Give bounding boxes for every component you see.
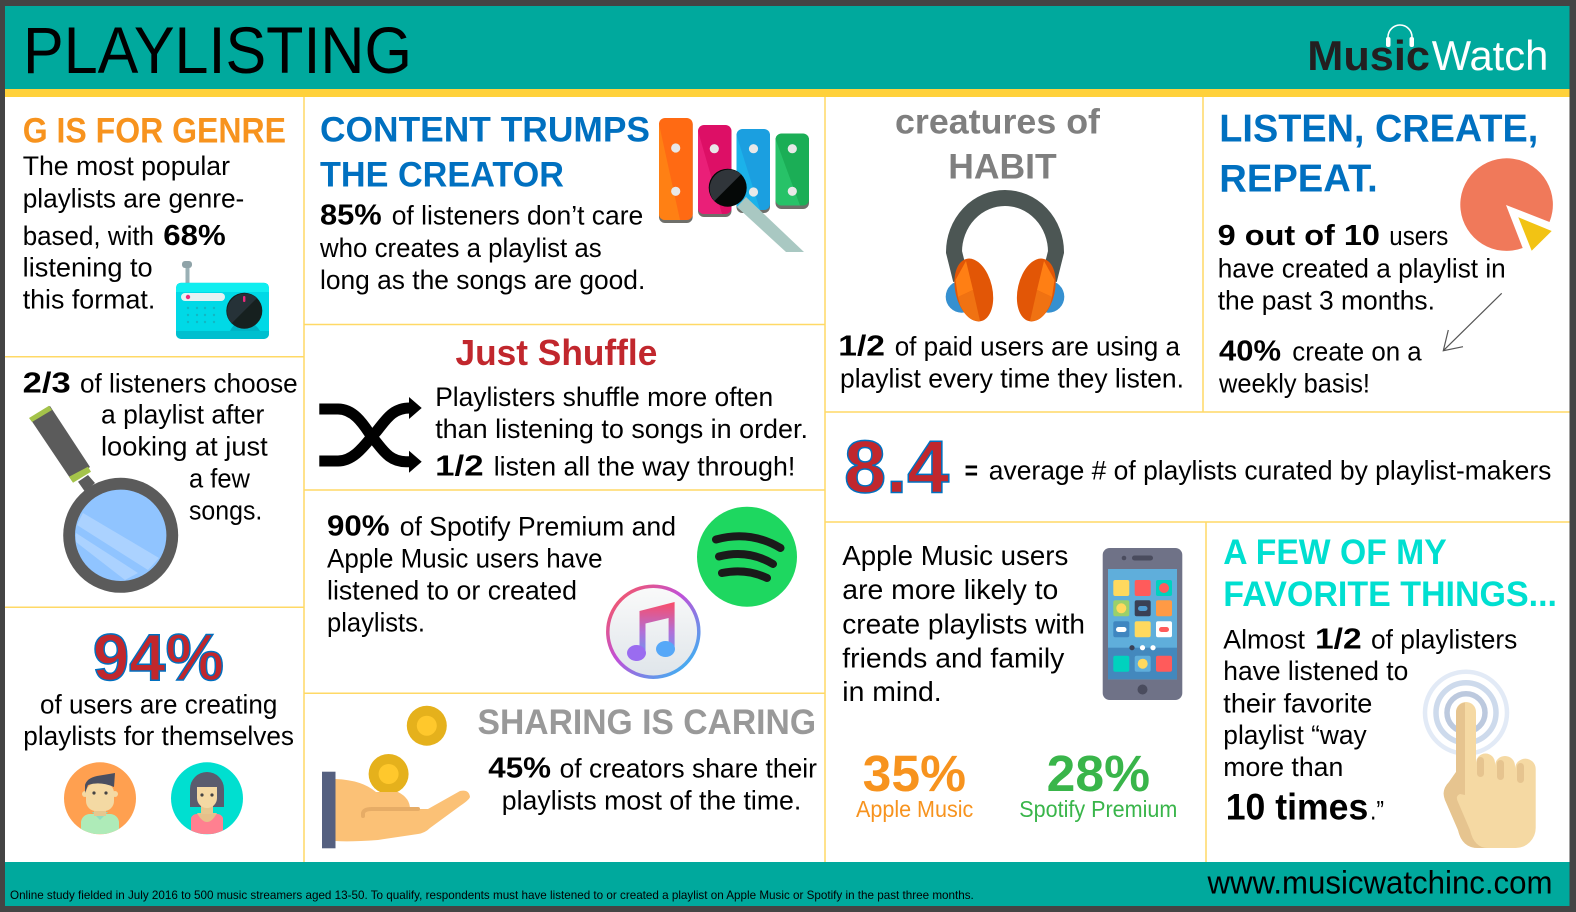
body text (23, 367, 298, 525)
body text: a playlist after (101, 399, 264, 429)
panel: content trumps the creator (319, 111, 809, 295)
body text: 1/2 (435, 451, 484, 483)
methodology note: Online study fielded in July 2016 to 500 music streamers aged 13-50. To qualify, respondents must have listened to or created a playlist on Apple Music or Spotify in the past three months. (10, 888, 974, 902)
body text: listen all the way through! (494, 452, 795, 482)
footer band (5, 862, 1570, 906)
body text: a few (189, 463, 250, 493)
heading (895, 102, 1100, 186)
body text: songs. (189, 495, 262, 525)
body text: playlists most of the time. (502, 785, 801, 815)
body text: Apple Music users (842, 540, 1068, 571)
big number: 94% (93, 620, 224, 694)
body text: Almost (1223, 624, 1305, 654)
heading (1223, 533, 1557, 614)
stat: apple music 35% (856, 745, 973, 822)
panel: sharing is caring (322, 703, 817, 848)
heading: G IS FOR GENRE (23, 112, 286, 151)
body text: of creators share their (560, 754, 817, 784)
body text: based, with (23, 221, 154, 251)
panel: a few of my favorite things (1223, 533, 1557, 848)
heading (1219, 108, 1538, 201)
body text: create playlists with (842, 608, 1085, 639)
panel: apple music vs spotify (842, 540, 1182, 822)
body text: their favorite (1223, 688, 1372, 718)
body text: this format. (23, 285, 155, 315)
body text: 68% (163, 220, 226, 252)
body text: of Spotify Premium and (400, 512, 676, 542)
body text: .” (1370, 795, 1384, 825)
body text: of users are creating (40, 690, 277, 720)
body text: listened to or created (327, 575, 577, 605)
body text: of paid users are using a (895, 332, 1181, 362)
title: PLAYLISTING (23, 13, 412, 87)
body text: the past 3 months. (1218, 285, 1435, 315)
icon: radio (176, 261, 269, 339)
body text: weekly basis! (1218, 369, 1370, 399)
big number: 8.4 (844, 425, 949, 508)
icon: xylophone (659, 118, 809, 252)
logo: MusicWatch: Music (1307, 32, 1430, 79)
body text: listening to (23, 253, 153, 283)
arrow (1443, 293, 1502, 351)
body text: The most popular (23, 151, 230, 181)
body text: than listening to songs in order. (435, 414, 808, 444)
body text (23, 151, 244, 315)
body text (842, 540, 1085, 707)
body text: users (1389, 221, 1448, 251)
icon: finger tapping (1425, 672, 1536, 848)
stat: spotify premium 28%: Spotify Premium (1019, 796, 1177, 822)
heading: FAVORITE THINGS... (1223, 575, 1557, 614)
heading: LISTEN, CREATE, (1219, 108, 1538, 151)
body text: create on a (1292, 337, 1423, 367)
icon: smartphone (1103, 548, 1182, 700)
icon: hand with coins (322, 706, 470, 848)
body text (1218, 220, 1506, 399)
body text: long as the songs are good. (320, 265, 645, 295)
heading (320, 111, 650, 195)
logo: MusicWatch: Watch (1432, 32, 1548, 79)
stat: spotify premium 28% (1019, 745, 1177, 822)
body text (838, 331, 1184, 394)
heading: A FEW OF MY (1223, 533, 1447, 572)
body text: playlist “way (1223, 720, 1367, 750)
heading: Just Shuffle (456, 332, 657, 373)
heading: HABIT (948, 147, 1057, 186)
panel: 2/3 of listeners (23, 367, 298, 593)
body text: looking at just (101, 432, 268, 462)
body text: playlists for themselves (23, 721, 294, 751)
body text: 90% (327, 511, 390, 543)
body text: 10 times (1226, 786, 1368, 827)
body text: of listeners don’t care (392, 200, 643, 230)
panel: 90% of spotify and apple music (327, 507, 797, 677)
body text: have listened to (1223, 656, 1408, 686)
icon: apple music logo (608, 586, 699, 677)
body text: 1/2 (1315, 623, 1362, 655)
body text: 1/2 (838, 331, 885, 363)
heading: SHARING IS CARING (478, 703, 816, 742)
icon: male avatar (64, 762, 136, 834)
caption: = (965, 456, 978, 486)
body text: 85% (320, 199, 382, 231)
panel: creatures of habit (838, 102, 1184, 394)
body text: friends and family (842, 642, 1064, 673)
body text (435, 382, 808, 483)
heading: REPEAT. (1219, 158, 1378, 201)
body text (327, 511, 676, 638)
body text: more than (1223, 752, 1343, 782)
body text: of listeners choose (80, 368, 298, 398)
panel: G is for genre (23, 112, 286, 339)
body text (488, 753, 817, 815)
website url: www.musicwatchinc.com (1207, 864, 1552, 900)
body text: 40% (1219, 336, 1281, 368)
icon: shuffle arrows (319, 397, 422, 473)
body text: of playlisters (1371, 624, 1517, 654)
panel: listen, create, repeat (1218, 108, 1553, 399)
body text: in mind. (842, 676, 942, 707)
body text: playlist every time they listen. (840, 364, 1184, 394)
body text: who creates a playlist as (319, 233, 602, 263)
heading: CONTENT TRUMPS (320, 111, 650, 150)
stat: apple music 35%: Apple Music (856, 796, 973, 822)
icon: magnifying glass (29, 406, 178, 593)
icon: pie chart (1460, 158, 1553, 251)
icon: spotify logo (697, 507, 797, 607)
heading: THE CREATOR (320, 156, 564, 195)
body text: have created a playlist in (1218, 253, 1506, 283)
body text: 9 out of 10 (1218, 220, 1380, 252)
body text (23, 690, 294, 751)
panel: just shuffle (319, 332, 808, 483)
stat: spotify premium 28%: 28% (1047, 745, 1150, 802)
panel: 94% (23, 620, 294, 834)
icon: female avatar (171, 762, 243, 834)
panel: 8.4 average (844, 425, 1551, 508)
body text: 2/3 (23, 367, 71, 399)
header band (5, 6, 1570, 97)
body text (1223, 623, 1517, 827)
stat: apple music 35%: 35% (863, 745, 966, 802)
body text: playlists. (327, 608, 425, 638)
body text (319, 199, 645, 295)
logo: MusicWatch (1307, 25, 1548, 79)
body text: 45% (488, 753, 551, 785)
body text: playlists are genre- (23, 184, 244, 214)
body text: Apple Music users have (327, 543, 603, 573)
icon: headphones (946, 198, 1064, 325)
heading: creatures of (895, 102, 1100, 141)
body text: Playlisters shuffle more often (435, 382, 773, 412)
body text: are more likely to (842, 574, 1058, 605)
caption: average # of playlists curated by playlist-makers (989, 456, 1551, 486)
